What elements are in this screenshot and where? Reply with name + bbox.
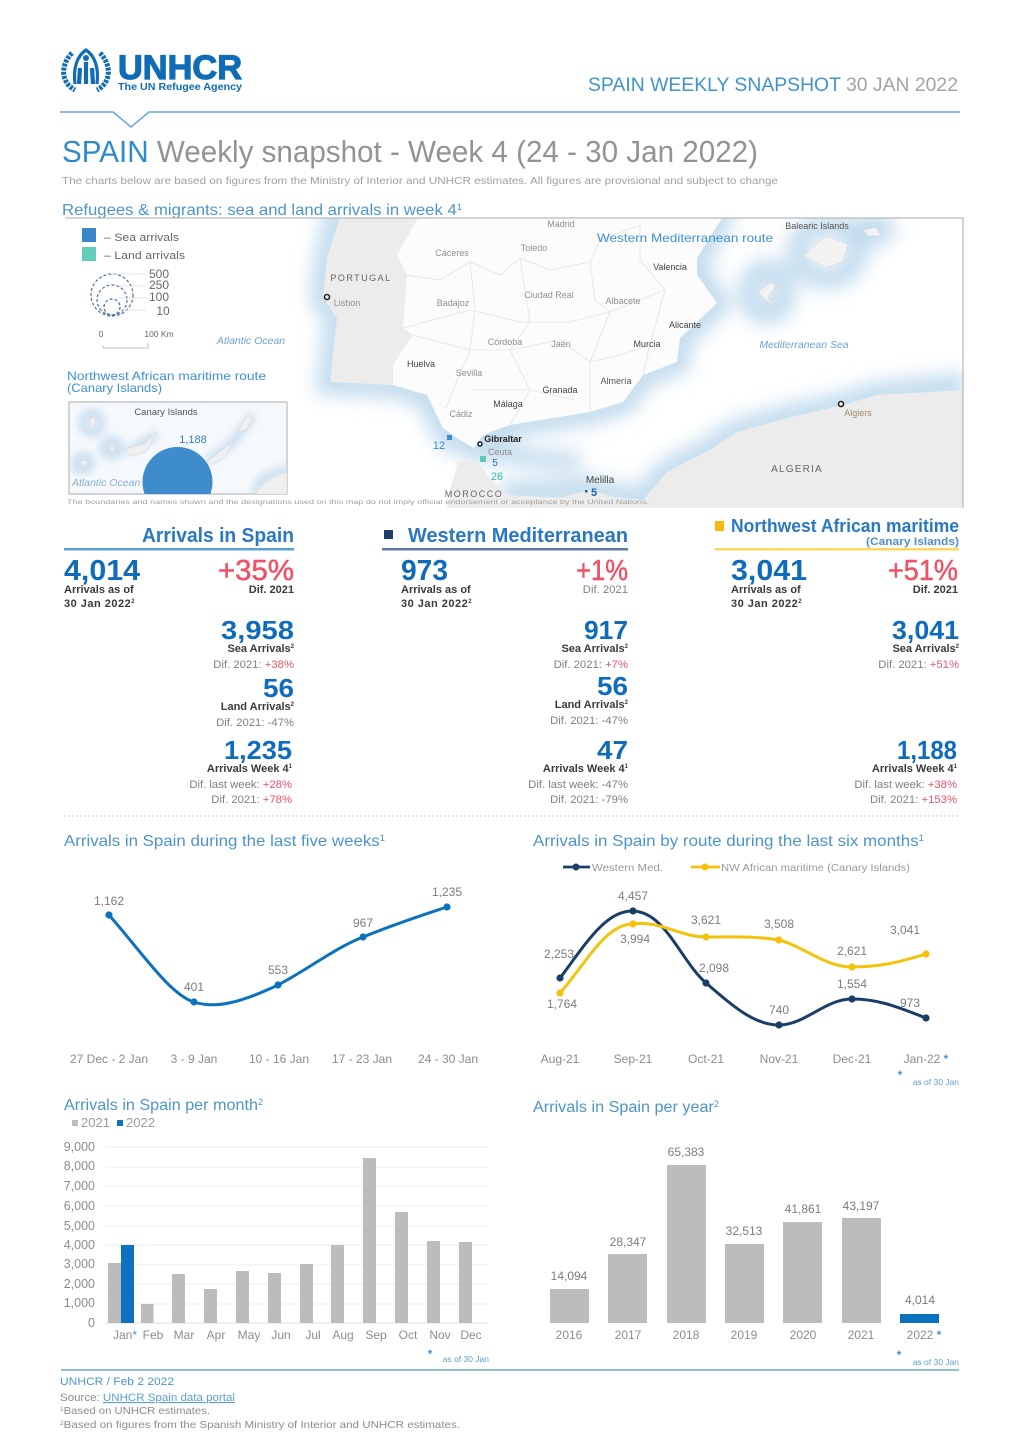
total arrivals (731, 555, 807, 610)
x axis labels (556, 1328, 942, 1342)
footnote: as of 30 Jan (443, 1354, 489, 1364)
inset value: 1,188 (179, 434, 207, 446)
x axis labels: Jun (271, 1328, 291, 1342)
map labels: ALGERIA (771, 464, 823, 475)
map data points: 26 (491, 471, 503, 483)
map labels: PORTUGAL (330, 273, 392, 283)
panel heading: Northwest African maritime (731, 516, 959, 536)
x axis labels: Oct (399, 1328, 418, 1342)
chart heading: Arrivals in Spain per month (64, 1097, 256, 1114)
map labels: Sevilla (456, 368, 482, 378)
inset heading: Canary route (67, 369, 266, 395)
x axis labels: 2019 (731, 1328, 758, 1342)
inset heading: Canary route: (Canary Islands) (67, 381, 162, 395)
change vs 2021: +35% (218, 555, 294, 587)
legend (72, 1115, 155, 1130)
sea arrivals: Sea Arrivals (892, 643, 956, 655)
gridlines and y axis: 4,000 (64, 1238, 95, 1252)
subtitle: The charts below are based on figures from the Ministry of Interior and UNHCR estimates. All figures are provisional and subject to change (62, 175, 778, 187)
x axis labels: 2022 * (907, 1328, 942, 1342)
total arrivals: 3,041 (731, 555, 807, 587)
province boundaries (403, 225, 665, 425)
land arrivals: Land Arrivals (555, 699, 625, 711)
panel: Arrivals in Spain (64, 525, 295, 806)
change vs 2021: +51% (888, 555, 958, 587)
land arrivals (216, 673, 295, 729)
data labels (94, 885, 462, 994)
map legend: 10 (156, 304, 170, 318)
map labels: Alicante (669, 320, 701, 330)
week arrivals: Dif. last week: -47% (528, 779, 628, 791)
week arrivals: 47 (597, 735, 628, 765)
gridlines and y axis: 3,000 (64, 1257, 95, 1271)
sea arrivals (213, 615, 295, 671)
footnote 2: 2 (60, 1421, 64, 1427)
data labels (551, 1145, 935, 1307)
gridlines and y axis: 0 (88, 1316, 95, 1330)
map heading: 1 (457, 202, 462, 212)
data labels: 43,197 (843, 1199, 880, 1213)
footnote 1: Based on UNHCR estimates. (64, 1405, 210, 1417)
line chart: last five weeks (64, 833, 478, 1066)
week arrivals: Arrivals Week 4 (872, 763, 954, 775)
total arrivals (64, 555, 140, 610)
footnote: * (428, 1347, 433, 1361)
map legend: 250 (149, 278, 169, 292)
total arrivals: 973 (401, 555, 448, 587)
x axis labels: Jan-22 * (904, 1052, 949, 1066)
legend: 2022 (126, 1115, 155, 1130)
footnote (428, 1347, 489, 1364)
map labels: Murcia (633, 339, 661, 349)
map labels: Gibraltar (484, 434, 522, 444)
legend: Western Med. (592, 862, 663, 874)
sea arrivals: Dif. 2021: +7% (554, 659, 628, 671)
total arrivals: Arrivals as of (401, 584, 471, 596)
x axis labels (541, 1052, 949, 1066)
series: Western Med (560, 911, 926, 1025)
data labels: 3,994 (620, 932, 650, 946)
footnote: * (897, 1348, 902, 1362)
chart heading: 2 (258, 1097, 263, 1107)
footer date: UNHCR / Feb 2 2022 (60, 1376, 174, 1388)
map labels: Lisbon (334, 298, 360, 308)
x axis labels: 3 - 9 Jan (171, 1052, 217, 1066)
x axis labels: 27 Dec - 2 Jan (70, 1052, 148, 1066)
week arrivals: 1 (625, 764, 629, 770)
week arrivals: 1,235 (224, 735, 292, 765)
route label: Western Mediterranean: Western Mediterranean route (597, 231, 773, 245)
data labels: 2,253 (544, 947, 574, 961)
x axis labels: Aug-21 (541, 1052, 580, 1066)
map legend: 0 (99, 329, 104, 339)
week arrivals: Arrivals Week 4 (543, 763, 625, 775)
icon: UNHCR emblem (64, 50, 108, 90)
panel heading: Arrivals in Spain (142, 525, 294, 547)
land arrivals: 56 (597, 671, 628, 701)
sea arrivals: 2 (625, 644, 629, 650)
sea arrivals: Dif. 2021: +51% (878, 659, 959, 671)
x axis labels: Jan* (113, 1328, 137, 1342)
inset heading: Canary route: Northwest African maritime route (67, 369, 266, 383)
data labels (544, 889, 920, 1017)
x axis labels: Nov (429, 1328, 451, 1342)
week arrivals: Dif. 2021: -79% (550, 794, 628, 806)
footnote 1: 1 (60, 1407, 64, 1413)
land: Spain (393, 218, 722, 448)
logo tagline: The UN Refugee Agency (118, 81, 242, 93)
x axis labels: 24 - 30 Jan (418, 1052, 478, 1066)
data labels: 973 (900, 996, 920, 1010)
map labels: Madrid (547, 219, 575, 229)
total arrivals: 30 Jan 2022 (731, 598, 798, 610)
legend: 2021 (81, 1115, 110, 1130)
land arrivals: Dif. 2021: -47% (216, 717, 294, 729)
data labels: 1,764 (547, 997, 577, 1011)
inset label: Atlantic Ocean: Atlantic Ocean (71, 477, 140, 489)
x axis labels: Sep-21 (614, 1052, 653, 1066)
data labels: 1,235 (432, 885, 462, 899)
data labels: 3,041 (890, 923, 920, 937)
data labels: 3,621 (691, 913, 721, 927)
bars (108, 1158, 472, 1323)
data labels: 41,861 (785, 1202, 822, 1216)
total arrivals (401, 555, 472, 610)
total arrivals: 30 Jan 2022 (401, 598, 468, 610)
land arrivals: 2 (291, 702, 295, 708)
x axis labels: Sep (365, 1328, 387, 1342)
map labels: Córdoba (488, 337, 522, 347)
week arrivals (528, 735, 629, 806)
logo: UNHCR (64, 49, 242, 93)
x axis labels: 2021 (848, 1328, 875, 1342)
chart heading: Arrivals in Spain per year (533, 1099, 712, 1116)
footnote: as of 30 Jan (913, 1357, 959, 1367)
x axis labels: Dec-21 (833, 1052, 872, 1066)
marker square (715, 521, 724, 531)
data labels: 401 (184, 980, 204, 994)
map labels: Melilla (586, 475, 615, 486)
bars (550, 1165, 939, 1323)
header rule with chevron (60, 112, 960, 127)
map labels: Ciudad Real (524, 290, 574, 300)
total arrivals: 2 (798, 599, 802, 605)
data labels: 553 (268, 963, 288, 977)
x axis labels (113, 1328, 482, 1342)
total arrivals: Arrivals as of (731, 584, 801, 596)
sea arrivals: 3,958 (221, 615, 294, 645)
data labels: 1,162 (94, 894, 124, 908)
legend (563, 862, 910, 874)
week arrivals (854, 735, 958, 806)
map labels: Jaén (551, 339, 571, 349)
chart heading: 2 (714, 1099, 719, 1109)
data labels: 4,457 (618, 889, 648, 903)
gridlines and y axis: 9,000 (64, 1140, 95, 1154)
map labels: Granada (542, 385, 578, 395)
map legend: 500 (149, 267, 169, 281)
footnote: as of 30 Jan (913, 1077, 959, 1087)
map labels (216, 219, 872, 499)
x axis labels: Dec (460, 1328, 482, 1342)
data labels: 65,383 (668, 1145, 705, 1159)
map labels: Ceuta (488, 447, 512, 457)
panel subheading: (Canary Islands) (866, 536, 959, 548)
x axis labels: Nov-21 (760, 1052, 799, 1066)
gridlines and y axis: 1,000 (64, 1296, 95, 1310)
map legend: – Sea arrivals (104, 232, 180, 244)
total arrivals: Arrivals as of (64, 584, 134, 596)
bar chart: per year (533, 1099, 959, 1367)
map heading: Refugees & migrants: sea and land arrivals in week 4 (62, 202, 440, 219)
map legend (82, 228, 186, 348)
x axis labels: Feb (143, 1328, 164, 1342)
map data points: 5 (492, 458, 498, 469)
sea arrivals: Sea Arrivals (561, 643, 625, 655)
map labels: Cádiz (449, 409, 473, 419)
week arrivals: Dif. 2021: +153% (870, 794, 957, 806)
land: north Africa (447, 390, 965, 508)
map source footnote: The boundaries and names shown and the designations used on this map do not imply official endorsement or acceptance by the United Nations. (67, 499, 649, 506)
gridlines and y axis: 5,000 (64, 1219, 95, 1233)
map labels: Badajoz (437, 298, 470, 308)
map labels: Valencia (653, 262, 687, 272)
map labels: MOROCCO (445, 489, 503, 499)
map labels: Cáceres (435, 248, 469, 258)
map labels: Almería (600, 376, 632, 386)
gridlines and y axis: 8,000 (64, 1159, 95, 1173)
footnote (898, 1068, 959, 1087)
gridlines and y axis: 7,000 (64, 1179, 95, 1193)
map labels: Algiers (844, 408, 872, 418)
week arrivals: Dif. last week: +38% (854, 779, 957, 791)
chart heading: Arrivals in Spain during the last five weeks (64, 833, 364, 850)
week arrivals (189, 735, 293, 806)
data labels: 967 (353, 916, 373, 930)
footer (60, 1376, 460, 1431)
map legend: – Land arrivals (104, 250, 186, 262)
map labels: Mediterranean Sea (759, 339, 849, 351)
data labels: 2,621 (837, 944, 867, 958)
sea arrivals (878, 615, 960, 671)
footnote 2: Based on figures from the Spanish Ministry of Interior and UNHCR estimates. (64, 1419, 460, 1431)
x axis labels (70, 1052, 478, 1066)
land arrivals: 2 (625, 700, 629, 706)
week arrivals: 1 (289, 764, 293, 770)
footnote (897, 1348, 959, 1367)
map labels: Málaga (493, 399, 523, 409)
data line (109, 907, 447, 1005)
header label: SPAIN WEEKLY SNAPSHOT 30 JAN 2022 (588, 75, 958, 96)
sea arrivals (554, 615, 629, 671)
week arrivals: Arrivals Week 4 (207, 763, 289, 775)
data labels: 28,347 (610, 1235, 647, 1249)
panel: Western Mediterranean (382, 525, 629, 806)
series: NW African maritime (560, 923, 926, 993)
map data points (433, 435, 597, 499)
x axis labels: Oct-21 (688, 1052, 724, 1066)
gridlines and y axis: 2,000 (64, 1277, 95, 1291)
chart heading: 1 (380, 833, 385, 843)
sea arrivals: 3,041 (892, 615, 959, 645)
map labels: Albacete (605, 296, 641, 306)
map labels: Huelva (407, 359, 435, 369)
line chart: by route (533, 833, 959, 1087)
week arrivals: 1 (954, 764, 958, 770)
land arrivals (550, 671, 629, 727)
x axis labels: 2016 (556, 1328, 583, 1342)
legend: NW African maritime (Canary Islands) (721, 862, 910, 874)
land arrivals: Land Arrivals (221, 701, 291, 713)
inset title: Canary Islands (134, 407, 198, 418)
sea arrivals: Dif. 2021: +38% (213, 659, 294, 671)
x axis labels: 10 - 16 Jan (249, 1052, 309, 1066)
data labels: 4,014 (905, 1293, 935, 1307)
x axis labels: Apr (207, 1328, 225, 1342)
sea arrivals: Sea Arrivals (227, 643, 291, 655)
week arrivals: 1,188 (897, 735, 957, 765)
land: Balearic Islands (758, 227, 881, 307)
map legend: 100 Km (144, 329, 174, 339)
gridlines and y axis (64, 1140, 488, 1330)
x axis labels: 17 - 23 Jan (332, 1052, 392, 1066)
map labels: Atlantic Ocean (216, 335, 285, 347)
week arrivals: Dif. 2021: +78% (211, 794, 292, 806)
total arrivals: 2 (131, 599, 135, 605)
sea arrivals: 2 (291, 644, 295, 650)
x axis labels: Mar (174, 1328, 194, 1342)
proportional circle: Canary arrivals (142, 447, 212, 494)
data labels: 3,508 (764, 917, 794, 931)
sea arrivals: 2 (956, 644, 960, 650)
x axis labels: 2018 (673, 1328, 700, 1342)
map data points: 5 (591, 487, 597, 499)
change vs 2021: Dif. 2021 (913, 584, 958, 596)
week arrivals: Dif. last week: +28% (189, 779, 292, 791)
marker square (384, 530, 393, 539)
map legend: 100 (149, 290, 169, 304)
change vs 2021: Dif. 2021 (249, 584, 294, 596)
panel: Northwest African maritime (715, 516, 960, 806)
land: Portugal (323, 218, 418, 385)
x axis labels: May (238, 1328, 260, 1342)
total arrivals: 2 (468, 599, 472, 605)
x axis labels: Aug (332, 1328, 354, 1342)
total arrivals: 4,014 (64, 555, 140, 587)
map data points: 12 (433, 440, 445, 452)
panel heading: Western Mediterranean (408, 525, 628, 547)
map labels: Balearic Islands (785, 221, 849, 231)
bar chart: per month (64, 1097, 489, 1364)
panel: Canary Islands inset (68, 402, 288, 494)
logo wordmark: UNHCR (118, 49, 242, 87)
change vs 2021: Dif. 2021 (583, 584, 628, 596)
chart heading: Arrivals in Spain by route during the last six months (533, 833, 897, 850)
total arrivals: 30 Jan 2022 (64, 598, 131, 610)
gridlines and y axis: 6,000 (64, 1199, 95, 1213)
change vs 2021: +1% (576, 555, 628, 587)
chart heading: 1 (919, 833, 924, 843)
footer source: Source: UNHCR Spain data portal (60, 1392, 235, 1404)
coastal sea glow (323, 205, 965, 502)
data labels: 1,554 (837, 977, 867, 991)
title: SPAIN Weekly snapshot - Week 4 (24 - 30 Jan 2022) (62, 134, 758, 169)
x axis labels: Jul (305, 1328, 321, 1342)
sea arrivals: 917 (584, 615, 628, 645)
data labels: 2,098 (699, 961, 729, 975)
x axis labels: 2017 (615, 1328, 642, 1342)
data labels: 14,094 (551, 1269, 588, 1283)
data labels: 32,513 (726, 1224, 763, 1238)
x axis labels: 2020 (790, 1328, 817, 1342)
land arrivals: 56 (263, 673, 294, 703)
panel: map (65, 205, 965, 508)
footnote: * (898, 1068, 903, 1082)
map labels: Toledo (521, 243, 547, 253)
data labels: 740 (769, 1003, 789, 1017)
land arrivals: Dif. 2021: -47% (550, 715, 628, 727)
